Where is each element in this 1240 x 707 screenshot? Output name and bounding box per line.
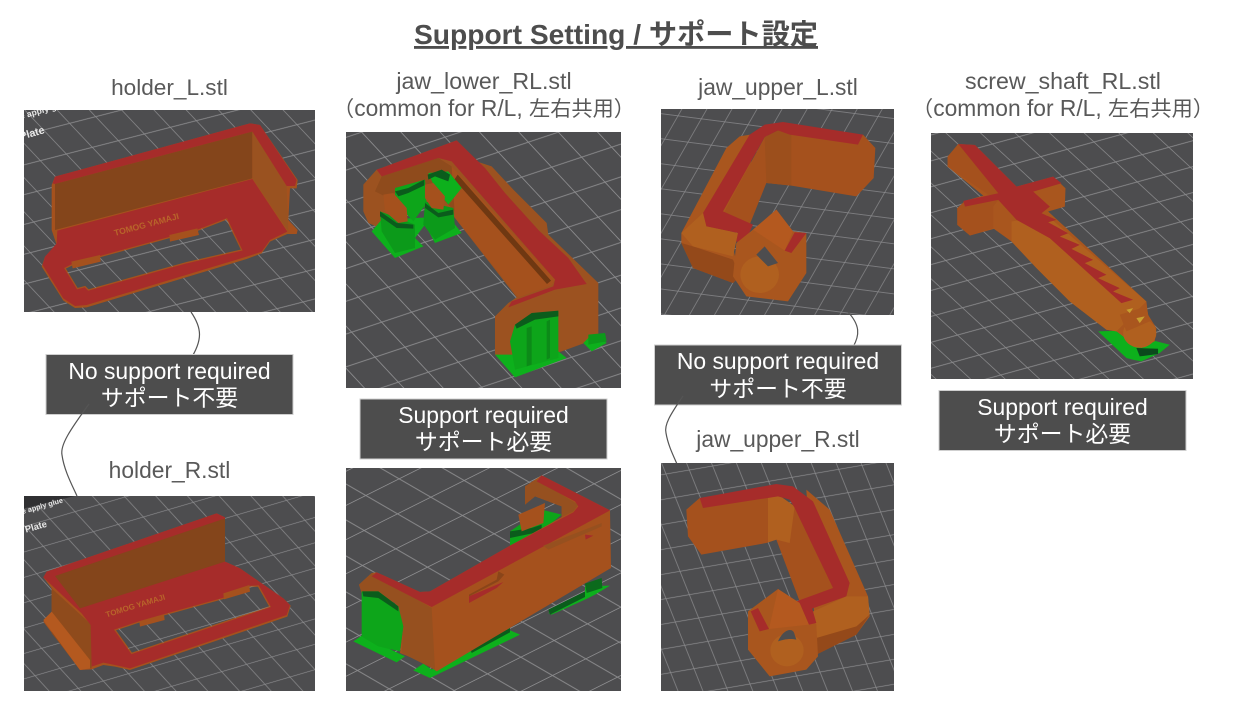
label: screw_shaft_RL.stl (912, 68, 1214, 121)
label: screw_shaft_RL.stl: screw_shaft_RL.stl (965, 68, 1161, 94)
holder model (42, 123, 298, 308)
plate caption (21, 496, 64, 535)
connector: note to jaw_upper_R (666, 396, 683, 464)
support material (1098, 331, 1170, 361)
callout: no support jaw_upper (654, 345, 902, 405)
support material front (362, 591, 403, 651)
support bases (353, 578, 610, 678)
holder model (43, 513, 291, 670)
jaw model (681, 122, 875, 301)
plate caption: Plate (18, 124, 46, 143)
label: holder_R.stl: holder_R.stl (109, 457, 230, 483)
holder model: TOMOG YAMAJI (105, 593, 166, 619)
label: jaw_lower_RL.stl: （common for R/L, 左右共用） (333, 95, 635, 121)
callout: support required screw shaft: サポート必要 (994, 421, 1131, 447)
callout: support required jaw_lower: サポート必要 (415, 429, 552, 455)
callout: no support holder (46, 354, 293, 414)
connector: holder_L to note (190, 312, 200, 360)
callout: no support jaw_upper: サポート不要 (709, 376, 847, 402)
callout: support required screw shaft (939, 390, 1186, 450)
label: screw_shaft_RL.stl: （common for R/L, 左右共用） (912, 95, 1214, 121)
panel: jaw_upper_R render (661, 463, 894, 691)
screw model (948, 144, 1156, 348)
callout: support required jaw_lower (360, 399, 607, 459)
label: jaw_upper_R.stl: jaw_upper_R.stl (695, 426, 860, 452)
panel: jaw_lower bottom view (346, 468, 621, 691)
jaw body (363, 140, 598, 366)
connector: jaw_upper_L to note (848, 312, 858, 347)
title: Support Setting / サポート設定 (414, 18, 818, 50)
plate caption: e apply glue (18, 98, 69, 121)
panel: jaw_lower top view (346, 132, 621, 388)
plate caption: e apply glue (21, 496, 64, 516)
callout: support required screw shaft: Support required (977, 394, 1148, 420)
panel: screw_shaft render (931, 133, 1193, 379)
panel: jaw_upper_L render (661, 109, 894, 315)
holder model: TOMOG YAMAJI (113, 211, 180, 238)
jaw model (686, 484, 870, 676)
label: holder_L.stl: holder_L.stl (111, 75, 228, 100)
panel: holder_L render (18, 98, 315, 312)
callout: no support holder: No support required (68, 358, 271, 384)
support material left (372, 170, 462, 258)
panel: holder_R render (21, 496, 315, 691)
connector: note to holder_R (62, 404, 89, 496)
label: jaw_upper_L.stl: jaw_upper_L.stl (697, 74, 858, 100)
jaw body (359, 475, 611, 671)
support material rear (510, 503, 562, 547)
label: jaw_lower_RL.stl (333, 68, 635, 121)
plate caption (18, 98, 69, 143)
callout: no support holder: サポート不要 (101, 385, 238, 411)
plate caption: Plate (24, 519, 48, 535)
support material right (495, 311, 607, 377)
callout: no support jaw_upper: No support required (677, 348, 879, 374)
label: jaw_lower_RL.stl: jaw_lower_RL.stl (395, 68, 572, 94)
callout: support required jaw_lower: Support required (398, 402, 569, 428)
